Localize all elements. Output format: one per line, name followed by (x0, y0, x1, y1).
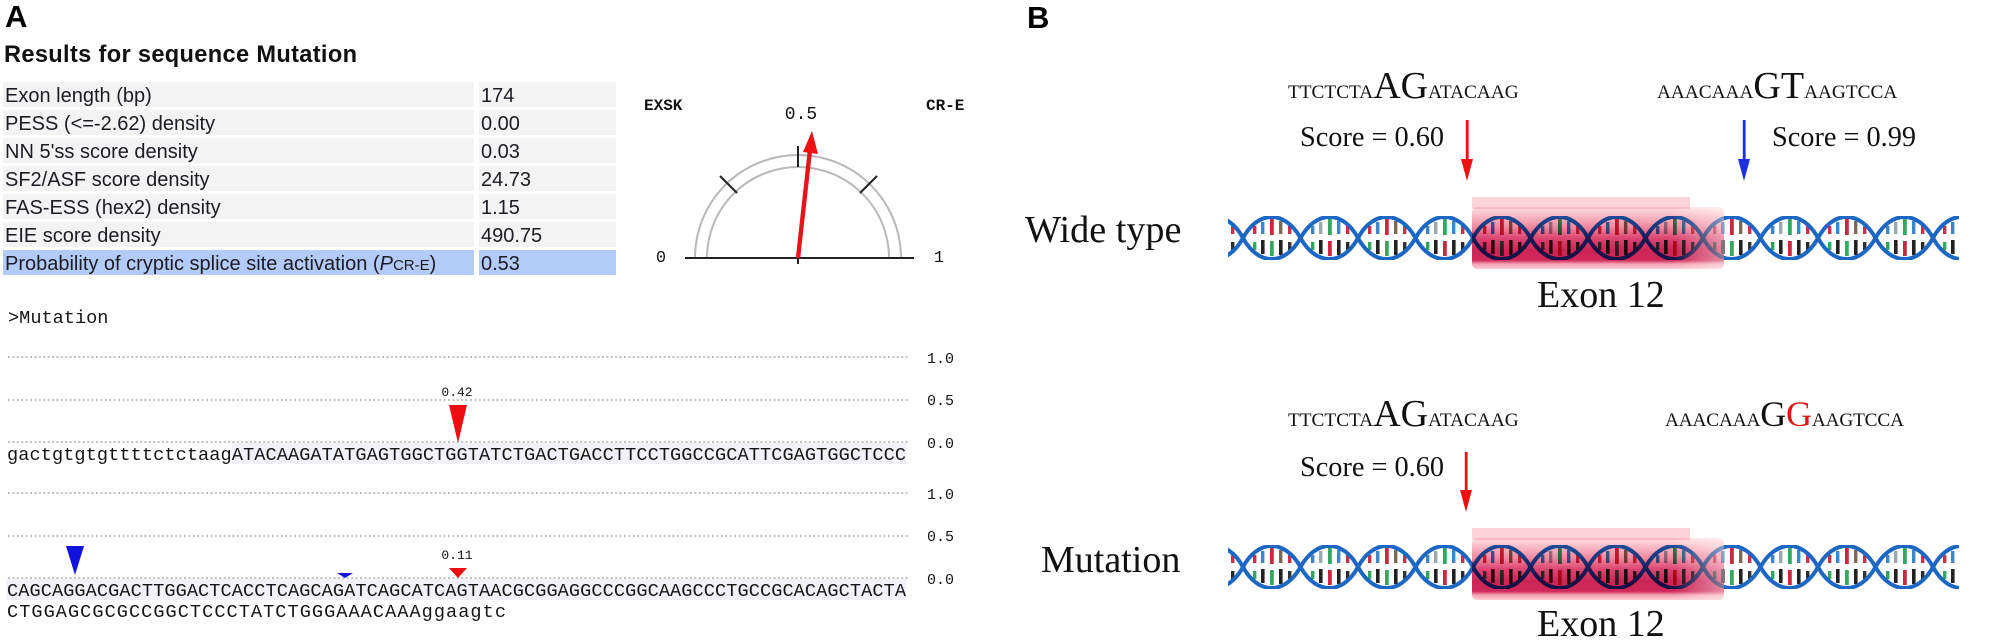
results table: SF2/ASF score density (5, 169, 210, 191)
right mutated splice sequence: AAACAAAGGAAGTCCA (1665, 394, 1904, 434)
axis labels track 1: 0.5 (927, 393, 954, 410)
gauge midpoint label: 0.5 (785, 105, 817, 125)
axis labels track 1 (927, 351, 954, 453)
gauge baseline and ticks (685, 146, 914, 264)
right splice sequence: AAACAAAGTAAGTCCA (1657, 65, 1897, 107)
arrow: red acceptor (1461, 120, 1473, 181)
sequence line 1: gactgtgtgttttctctaagATACAAGATATGAGTGGCTGGTATCTGACTGACCTTCCTGGCCGCATTCGAGTGGCTCCC (7, 445, 906, 466)
panel label B: B (1027, 0, 1049, 35)
DNA helix wild type (1228, 216, 1959, 260)
results table: PESS (<=-2.62) density (5, 113, 215, 135)
marker: red 0.42 (441, 385, 473, 443)
DNA helix mutation (1228, 545, 1959, 589)
axis labels track 1: 0.0 (927, 436, 954, 453)
results table: FAS-ESS (hex2) density (5, 197, 221, 219)
marker: red 0.11: 0.11 (441, 548, 473, 563)
marker: red 0.42: 0.42 (441, 385, 473, 400)
left score: Score = 0.60 (1300, 122, 1444, 153)
heading: results for sequence: Results for sequence Mutation (4, 42, 357, 68)
axis labels track 2 (927, 487, 954, 589)
results table: NN 5'ss score density (5, 141, 198, 163)
exon label wild type: Exon 12 (1537, 274, 1665, 316)
left score: Score = 0.60 (1300, 452, 1444, 483)
results table: Probability of cryptic splice site activation (PCR-E) (5, 253, 436, 275)
sequence line 3: CTGGAGCGCGCCGGCTCCCTATCTGGGAAACAAAggaagtc (7, 602, 506, 623)
gauge end label EXSK: EXSK (644, 97, 683, 115)
left splice sequence: TTCTCTAAGATACAAG (1288, 393, 1519, 435)
results table: 24.73 (481, 169, 531, 191)
score track 2 (6, 487, 954, 623)
results table: 0.03 (481, 141, 520, 163)
results table: Exon length (bp) (5, 85, 152, 107)
arrow: blue donor (1738, 120, 1750, 181)
marker: large blue (66, 546, 84, 575)
exon cylinder wild type (1472, 197, 1724, 269)
exon cylinder mutation (1472, 528, 1724, 600)
gauge end label CR-E: CR-E (926, 97, 964, 115)
score track 1 (7, 351, 954, 493)
row label: wide type: Wide type (1025, 209, 1181, 251)
axis labels track 1: 1.0 (927, 351, 954, 368)
panel label A: A (5, 0, 27, 34)
results table: 490.75 (481, 225, 542, 247)
sequence line 2: CAGCAGGACGACTTGGACTCACCTCAGCAGATCAGCATCAGTAACGCGGAGGCCCGGCAAGCCCTGCCGCACAGCTACTA (7, 581, 907, 602)
mutation group (1041, 393, 1959, 643)
results table: 0.53 (481, 253, 520, 275)
axis labels track 2: 0.5 (927, 529, 954, 546)
results table: EIE score density (5, 225, 161, 247)
results table (3, 82, 616, 275)
marker: red 0.11 (441, 548, 473, 578)
right score: Score = 0.99 (1772, 122, 1916, 153)
results table: 1.15 (481, 197, 520, 219)
gauge needle (798, 131, 818, 258)
results table: 0.00 (481, 113, 520, 135)
gauge zero label: 0 (656, 249, 666, 268)
axis labels track 2: 1.0 (927, 487, 954, 504)
gauge arcs (695, 155, 901, 258)
sequence header: >Mutation (8, 308, 108, 329)
axis labels track 2: 0.0 (927, 572, 954, 589)
marker: small blue (337, 573, 353, 578)
gauge one label: 1 (934, 249, 944, 268)
gauge: probability dial (644, 97, 964, 268)
results table: 174 (481, 85, 514, 107)
row label: mutation: Mutation (1041, 539, 1180, 581)
wild type group (1025, 65, 1959, 316)
left splice sequence: TTCTCTAAGATACAAG (1288, 65, 1519, 107)
arrow: red acceptor (1460, 452, 1472, 512)
